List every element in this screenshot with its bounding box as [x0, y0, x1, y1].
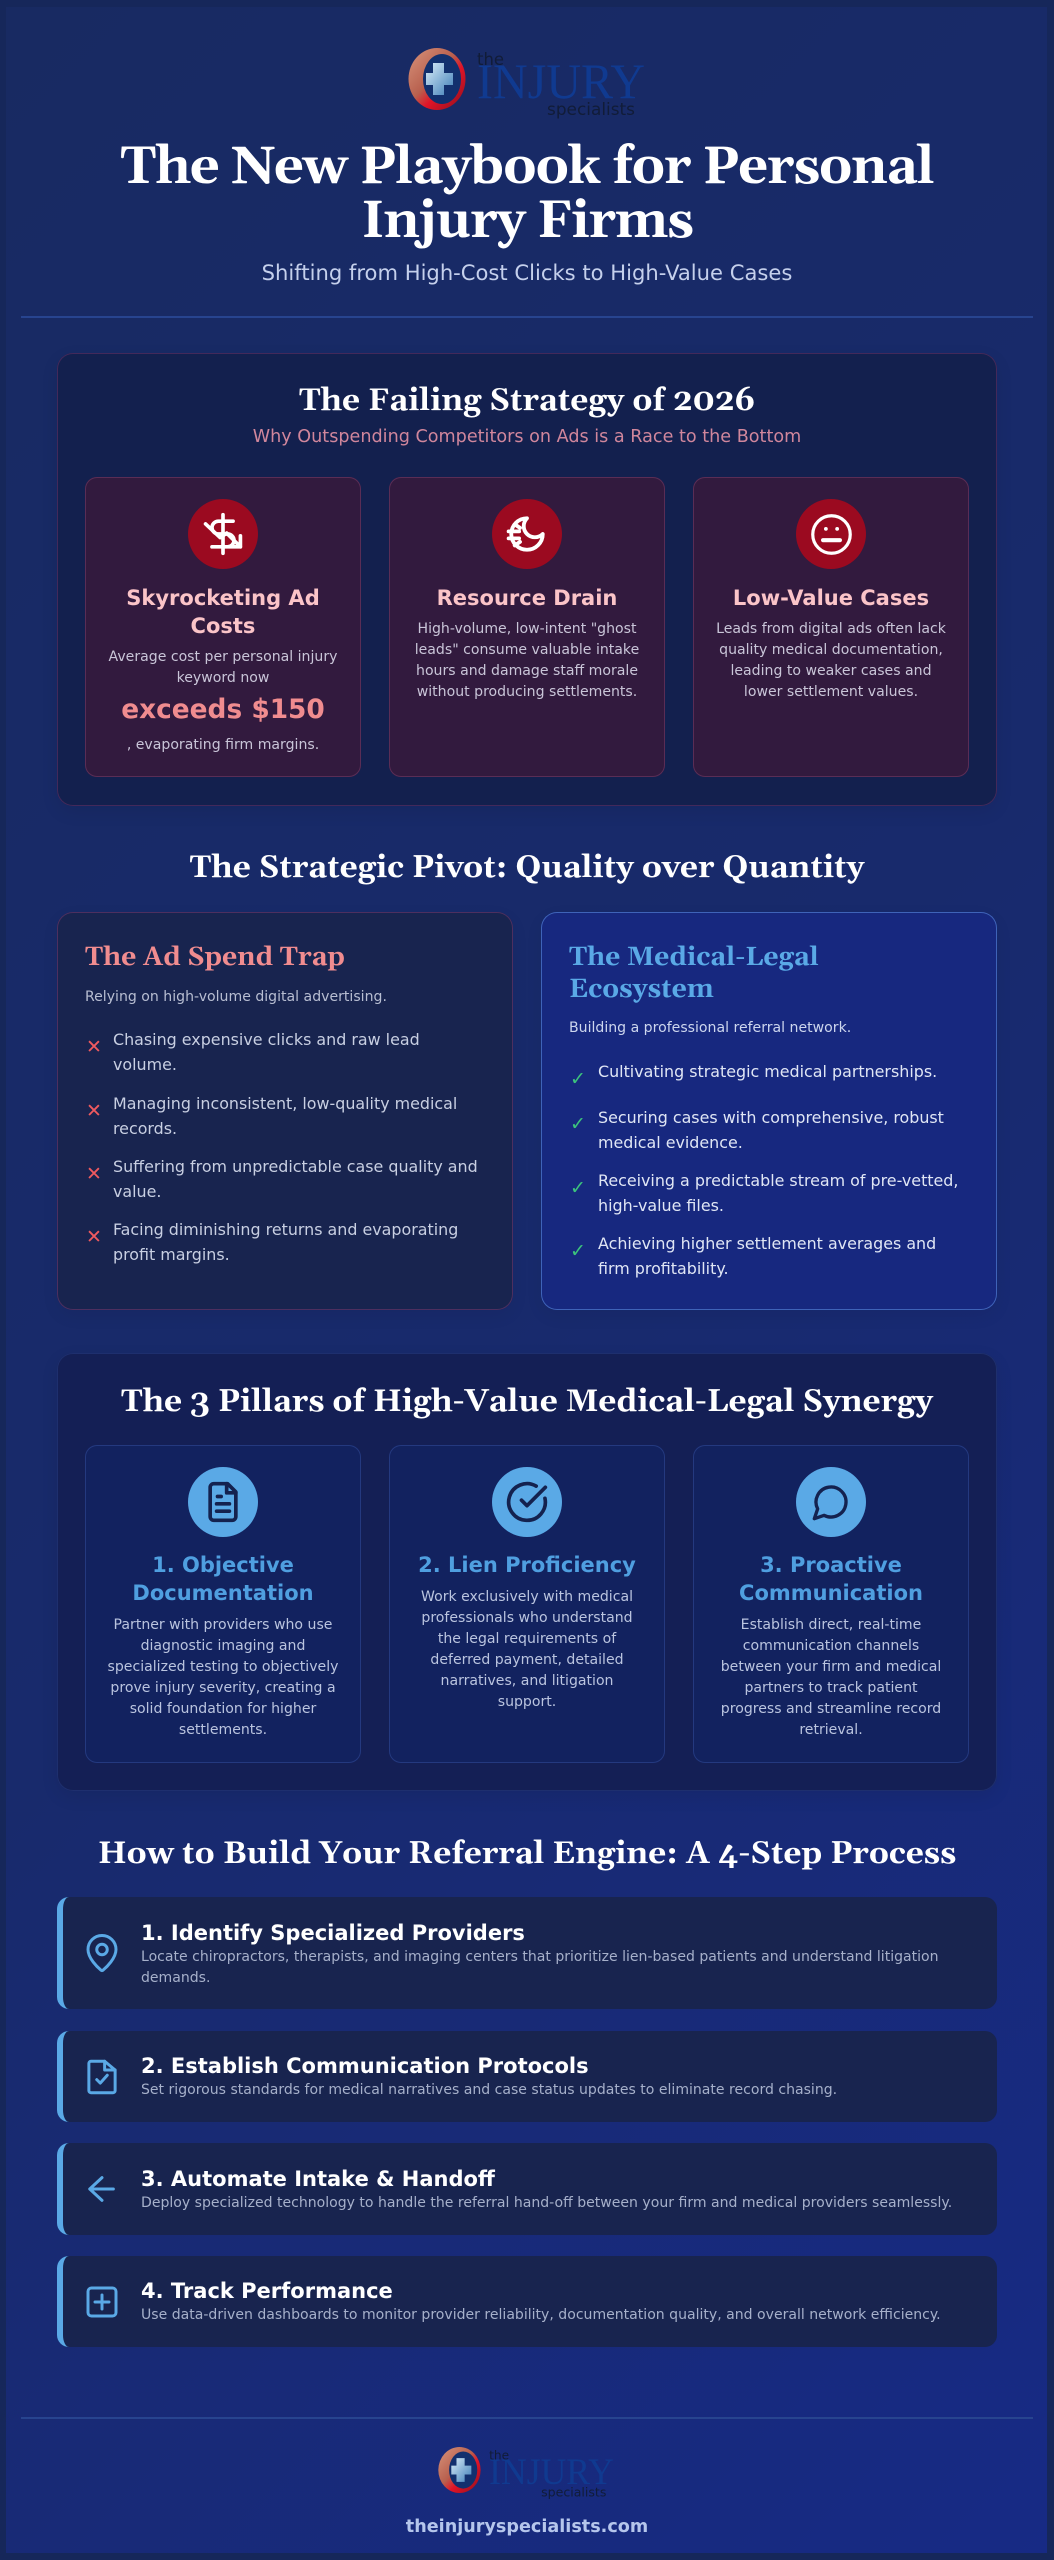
heading: failing strategy: The Failing Strategy of 2026	[299, 381, 755, 421]
header logo	[408, 48, 645, 120]
heading: three pillars: The 3 Pillars of High-Value Medical-Legal Synergy	[121, 1382, 933, 1422]
card text: settlements.	[179, 1722, 267, 1738]
icon: arrow left	[88, 2176, 115, 2202]
card heading: Costs	[191, 614, 255, 638]
card text: lower settlement values.	[744, 684, 918, 700]
step heading: 3. Automate Intake & Handoff	[141, 2167, 495, 2191]
card text: communication channels	[743, 1638, 919, 1654]
title: The New Playbook for Personal	[120, 134, 934, 201]
list item	[113, 1030, 420, 1074]
step text: Locate chiropractors, therapists, and imaging centers that prioritize lien-based patients and understand litigation	[141, 1949, 939, 1965]
card heading: Resource Drain	[437, 586, 617, 610]
list item: Securing cases with comprehensive, robust	[598, 1108, 944, 1127]
heading: strategic pivot: The Strategic Pivot: Quality over Quantity	[190, 848, 864, 888]
list item: value.	[113, 1182, 161, 1201]
card text: the legal requirements of	[438, 1631, 616, 1647]
footer logo: specialists	[541, 2485, 606, 2500]
card text: High-volume, low-intent "ghost	[417, 621, 636, 637]
panel: failing strategy	[57, 353, 997, 806]
step text: Set rigorous standards for medical narratives and case status updates to eliminate record chasing.	[141, 2082, 837, 2098]
list item: Cultivating strategic medical partnerships.	[598, 1062, 937, 1081]
list item	[598, 1234, 936, 1278]
card heading	[126, 586, 320, 638]
card text: keyword now	[177, 670, 269, 686]
step text	[141, 1949, 939, 1986]
step heading: 2. Establish Communication Protocols	[141, 2054, 589, 2078]
card heading	[132, 1553, 314, 1605]
card text: progress and streamline record	[721, 1701, 941, 1717]
card text: partners to track patient	[744, 1680, 918, 1696]
step 3	[57, 2143, 997, 2235]
panel intro: Building a professional referral network.	[569, 1020, 851, 1036]
card text: Leads from digital ads often lack	[716, 621, 946, 637]
heading: four-step process: How to Build Your Referral Engine: A 4-Step Process	[98, 1834, 956, 1874]
card text: support.	[498, 1694, 556, 1710]
card text: leads" consume valuable intake	[415, 642, 639, 658]
card text	[421, 1589, 633, 1710]
panel heading: Ecosystem	[569, 973, 714, 1007]
header logo: INJURY	[477, 53, 645, 109]
step text: demands.	[141, 1970, 210, 1986]
list item: Suffering from unpredictable case quality and	[113, 1157, 478, 1176]
list item	[598, 1108, 944, 1152]
card: proactive communication	[693, 1445, 969, 1763]
card heading: 1. Objective	[152, 1553, 294, 1577]
step heading: 1. Identify Specialized Providers	[141, 1921, 525, 1945]
icon: neutral face	[796, 499, 866, 569]
icon: falling dollar	[188, 499, 258, 569]
list item	[598, 1171, 958, 1215]
list item: Chasing expensive clicks and raw lead	[113, 1030, 420, 1049]
card text: professionals who understand	[421, 1610, 633, 1626]
list item	[113, 1220, 458, 1264]
panel: medical-legal ecosystem	[541, 912, 997, 1310]
card text: without producing settlements.	[417, 684, 637, 700]
card text: deferred payment, detailed	[430, 1652, 624, 1668]
card text: retrieval.	[799, 1722, 863, 1738]
panel heading: The Medical-Legal	[569, 941, 819, 975]
list item: high-value files.	[598, 1196, 724, 1215]
card heading: Communication	[739, 1581, 923, 1605]
list item: records.	[113, 1119, 177, 1138]
card text: leading to weaker cases and	[730, 663, 932, 679]
footer logo	[438, 2447, 614, 2500]
card heading: Skyrocketing Ad	[126, 586, 320, 610]
icon: plus square	[86, 2286, 118, 2318]
panel heading: The Ad Spend Trap	[85, 941, 345, 975]
card text: Average cost per personal injury	[109, 649, 337, 665]
list item: profit margins.	[113, 1245, 230, 1264]
card heading: 3. Proactive	[760, 1553, 902, 1577]
card text: hours and damage staff morale	[416, 663, 638, 679]
card heading	[739, 1553, 923, 1605]
marker: ✓	[570, 1113, 586, 1135]
card: lien proficiency	[389, 1445, 665, 1763]
card text: solid foundation for higher	[130, 1701, 316, 1717]
footer logo: INJURY	[489, 2452, 614, 2493]
list item: Managing inconsistent, low-quality medical	[113, 1094, 457, 1113]
list item: Receiving a predictable stream of pre-vetted,	[598, 1171, 958, 1190]
footer logo: the	[489, 2448, 509, 2463]
panel heading	[569, 941, 819, 1007]
card: resource drain	[389, 477, 665, 777]
list item: Achieving higher settlement averages and	[598, 1234, 936, 1253]
subheading: failing strategy: Why Outspending Competitors on Ads is a Race to the Bottom	[253, 427, 801, 447]
icon: check circle	[492, 1467, 562, 1537]
card text end: , evaporating firm margins.	[127, 737, 319, 753]
card: objective documentation	[85, 1445, 361, 1763]
panel: three pillars	[57, 1353, 997, 1791]
card text: prove injury severity, creating a	[110, 1680, 336, 1696]
list item	[113, 1094, 457, 1138]
step text: Use data-driven dashboards to monitor provider reliability, documentation quality, and overall network efficiency.	[141, 2307, 941, 2323]
marker: ✓	[570, 1068, 586, 1090]
marker: ✕	[86, 1036, 102, 1058]
card text: Work exclusively with medical	[421, 1589, 633, 1605]
icon: moon	[492, 499, 562, 569]
card text: quality medical documentation,	[719, 642, 943, 658]
step 4	[57, 2256, 997, 2347]
step 1	[57, 1897, 997, 2009]
icon: speech bubble	[796, 1467, 866, 1537]
card text: between your firm and medical	[721, 1659, 941, 1675]
marker: ✓	[570, 1177, 586, 1199]
panel: ad spend trap	[57, 912, 513, 1310]
card text: narratives, and litigation	[441, 1673, 613, 1689]
marker: ✕	[86, 1163, 102, 1185]
card text: diagnostic imaging and	[141, 1638, 305, 1654]
marker: ✓	[570, 1240, 586, 1262]
list item: volume.	[113, 1055, 177, 1074]
card heading: 2. Lien Proficiency	[418, 1553, 636, 1577]
card text: Partner with providers who use	[114, 1617, 332, 1633]
card text	[721, 1617, 941, 1738]
list item: firm profitability.	[598, 1259, 729, 1278]
step heading: 4. Track Performance	[141, 2279, 393, 2303]
card heading: Low-Value Cases	[733, 586, 929, 610]
list item: medical evidence.	[598, 1133, 743, 1152]
marker: ✕	[86, 1100, 102, 1122]
step 2	[57, 2031, 997, 2122]
icon: document	[188, 1467, 258, 1537]
card: low-value cases	[693, 477, 969, 777]
card text	[716, 621, 946, 700]
stat: exceeds $150: exceeds $150	[121, 694, 325, 725]
list item	[113, 1157, 478, 1201]
title	[120, 134, 934, 255]
icon: map pin	[86, 1934, 118, 1972]
card: skyrocketing ad costs	[85, 477, 361, 777]
marker: ✕	[86, 1226, 102, 1248]
card text	[108, 649, 337, 686]
icon: file check	[87, 2060, 117, 2094]
card text	[108, 1617, 338, 1738]
card text	[415, 621, 639, 700]
card text: specialized testing to objectively	[108, 1659, 338, 1675]
subtitle: Shifting from High-Cost Clicks to High-Value Cases	[262, 260, 792, 285]
header logo: the	[477, 50, 504, 70]
footer website: theinjuryspecialists.com	[406, 2517, 648, 2537]
list item: Facing diminishing returns and evaporating	[113, 1220, 458, 1239]
header logo: specialists	[547, 100, 635, 120]
panel intro: Relying on high-volume digital advertising.	[85, 989, 387, 1005]
card text: Establish direct, real-time	[741, 1617, 921, 1633]
step text: Deploy specialized technology to handle the referral hand-off between your firm and medical providers seamlessly.	[141, 2195, 952, 2211]
card heading: Documentation	[132, 1581, 314, 1605]
title: Injury Firms	[361, 188, 693, 255]
